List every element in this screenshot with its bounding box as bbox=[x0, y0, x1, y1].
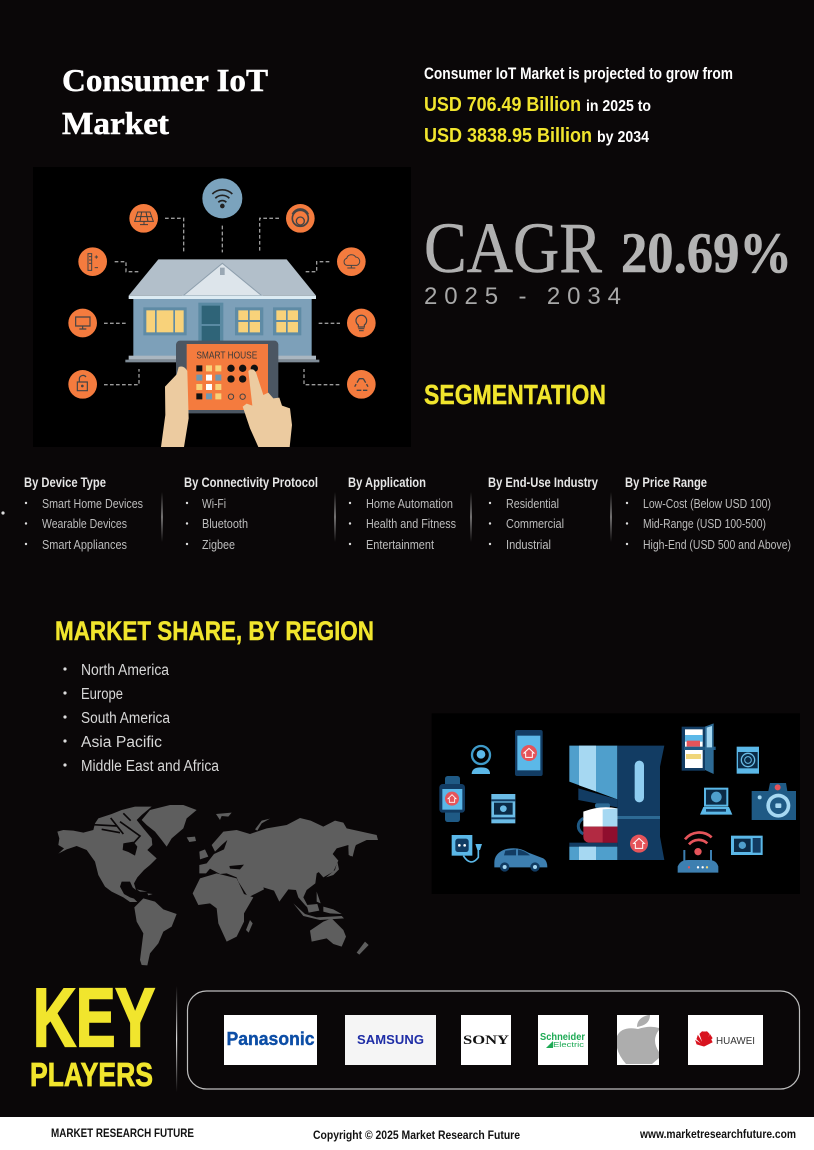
segmentation: by end-use industry: By End-Use Industry bbox=[488, 475, 598, 490]
segmentation: by price range bbox=[625, 475, 791, 552]
key players panel bbox=[188, 991, 800, 1089]
microwave bbox=[731, 836, 763, 855]
title: Market bbox=[62, 105, 169, 141]
illustration: smart appliances bbox=[432, 713, 800, 894]
key players heading bbox=[30, 971, 155, 1093]
tablet: SMART HOUSE bbox=[196, 350, 257, 361]
segmentation: by device type: Smart Home Devices bbox=[42, 497, 143, 511]
japan bbox=[326, 862, 339, 877]
region list bbox=[63, 662, 219, 775]
segmentation: by device type bbox=[24, 475, 143, 552]
icon: security camera bbox=[286, 204, 315, 233]
region list: Europe bbox=[81, 686, 123, 703]
key players heading: KEY bbox=[33, 971, 155, 1064]
hudson bay and arctic channels bbox=[123, 842, 137, 856]
tablet bbox=[176, 341, 278, 413]
segmentation: by end-use industry: Residential bbox=[506, 497, 559, 511]
stray dot bbox=[1, 511, 5, 515]
segmentation: by application: Home Automation bbox=[366, 497, 453, 511]
svalbard bbox=[216, 813, 232, 820]
logo: huawei: HUAWEI bbox=[716, 1036, 755, 1047]
south america bbox=[134, 898, 177, 965]
caribbean islands bbox=[137, 889, 153, 895]
title bbox=[62, 62, 268, 141]
region list: Middle East and Africa bbox=[81, 758, 219, 775]
novaya zemlya bbox=[255, 819, 270, 831]
market projection text: USD 3838.95 Billion bbox=[424, 124, 592, 147]
CAGR figure: CAGR bbox=[424, 208, 602, 288]
iceland bbox=[187, 837, 196, 842]
oven bbox=[491, 794, 515, 823]
logo: sony bbox=[461, 1015, 511, 1065]
icon: wifi bbox=[202, 178, 242, 218]
segmentation: by price range: By Price Range bbox=[625, 475, 707, 490]
icon: cloud bbox=[337, 247, 366, 276]
socket and plug bbox=[452, 835, 482, 862]
segmentation: by device type: Wearable Devices bbox=[42, 517, 127, 531]
segmentation: by connectivity protocol: Wi-Fi bbox=[202, 497, 226, 511]
illustration: smart house bbox=[33, 167, 411, 447]
icon: lock bbox=[68, 370, 97, 399]
heading: market share by region: MARKET SHARE, BY REGION bbox=[55, 616, 374, 646]
logo: panasonic bbox=[224, 1015, 317, 1065]
north america bbox=[57, 807, 157, 902]
phone bbox=[515, 730, 543, 776]
logo: panasonic: Panasonic bbox=[226, 1029, 314, 1049]
segmentation: by end-use industry: Industrial bbox=[506, 538, 551, 552]
webcam bbox=[472, 746, 490, 774]
segmentation: by application: Health and Fitness bbox=[366, 517, 456, 531]
fridge bbox=[682, 723, 716, 774]
icon: recycle bbox=[347, 370, 376, 399]
segmentation: by end-use industry: Commercial bbox=[506, 517, 564, 531]
heading: segmentation: SEGMENTATION bbox=[424, 379, 606, 410]
laptop bbox=[700, 788, 732, 815]
hands bbox=[161, 366, 292, 447]
house bbox=[125, 259, 319, 362]
segmentation: by application: Entertainment bbox=[366, 538, 434, 552]
market projection text: by 2034 bbox=[597, 129, 649, 146]
world map bbox=[57, 805, 378, 965]
black sea bbox=[229, 865, 244, 869]
segmentation: by application bbox=[348, 475, 456, 552]
coffee maker bbox=[569, 746, 664, 860]
CAGR figure: 20.69% bbox=[621, 222, 792, 285]
logo: sony: SONY bbox=[463, 1033, 509, 1047]
logo: schneider electric: Electric bbox=[553, 1042, 585, 1049]
icon: light bulb bbox=[347, 309, 376, 337]
smartwatch bbox=[439, 776, 465, 822]
segmentation: by connectivity protocol: Zigbee bbox=[202, 538, 235, 552]
CAGR figure: 2025 - 2034 bbox=[424, 283, 621, 310]
eurasia bbox=[199, 818, 378, 910]
segmentation: by end-use industry bbox=[488, 475, 598, 552]
segmentation: by device type: Smart Appliances bbox=[42, 538, 127, 552]
region list: Asia Pacific bbox=[81, 734, 162, 751]
segmentation: by device type: By Device Type bbox=[24, 475, 106, 490]
icon: thermometer bbox=[78, 247, 107, 276]
title: Consumer IoT bbox=[62, 62, 268, 98]
region list: North America bbox=[81, 662, 169, 679]
footer: Copyright © 2025 Market Research Future bbox=[313, 1128, 520, 1142]
connector lines bbox=[104, 218, 340, 385]
footer bbox=[0, 1117, 814, 1150]
segmentation: by price range: Low-Cost (Below USD 100) bbox=[643, 497, 771, 511]
kamchatka bbox=[348, 843, 356, 857]
logo: apple bbox=[617, 1015, 659, 1065]
segmentation: by connectivity protocol: By Connectivity Protocol bbox=[184, 475, 318, 490]
southeast asia islands bbox=[293, 892, 344, 920]
region list: South America bbox=[81, 710, 170, 727]
madagascar bbox=[246, 920, 253, 933]
icon: solar panel bbox=[129, 204, 158, 233]
footer: MARKET RESEARCH FUTURE bbox=[51, 1126, 194, 1140]
icon: monitor bbox=[68, 309, 97, 337]
router bbox=[678, 833, 718, 873]
logo: huawei bbox=[688, 1015, 763, 1065]
segmentation: by connectivity protocol: Bluetooth bbox=[202, 517, 248, 531]
logo: schneider electric bbox=[538, 1015, 588, 1065]
logo: samsung: SAMSUNG bbox=[357, 1032, 424, 1047]
camera bbox=[752, 783, 796, 820]
new zealand bbox=[357, 942, 369, 955]
africa bbox=[193, 873, 253, 942]
market projection text: in 2025 to bbox=[586, 98, 651, 115]
CAGR figure bbox=[424, 208, 792, 310]
logo: schneider electric: Schneider bbox=[540, 1031, 585, 1043]
washing machine bbox=[737, 747, 759, 774]
market projection text: USD 706.49 Billion bbox=[424, 93, 581, 116]
segmentation: by connectivity protocol bbox=[184, 475, 318, 552]
market projection text: Consumer IoT Market is projected to grow from bbox=[424, 65, 733, 83]
car bbox=[494, 848, 547, 872]
united kingdom bbox=[199, 849, 208, 859]
key players heading: PLAYERS bbox=[30, 1056, 153, 1093]
segmentation: by application: By Application bbox=[348, 475, 426, 490]
australia bbox=[310, 918, 346, 947]
logo: samsung bbox=[345, 1015, 436, 1065]
segmentation: by price range: Mid-Range (USD 100-500) bbox=[643, 517, 766, 531]
market projection text bbox=[424, 65, 733, 147]
greenland bbox=[142, 805, 197, 847]
